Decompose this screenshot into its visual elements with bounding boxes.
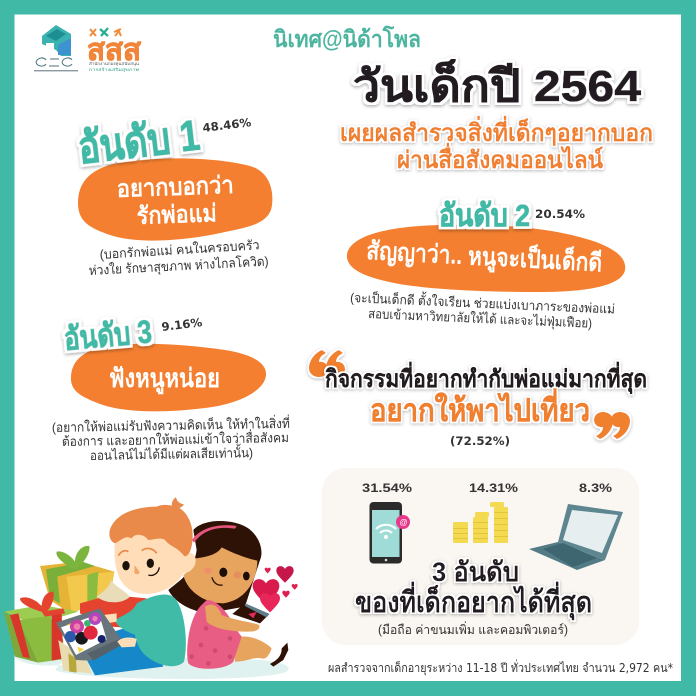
blob 3 text: ฟังหนูหน่อย [109,363,220,395]
boy face [115,520,190,594]
logo: GSCM [34,25,78,71]
rank 3 description: ออนไลน์ไม่ได้มีแต่ผลเสียเท่านั้น) [90,443,253,463]
panel heading: 3 อันดับ [432,557,519,587]
rank 1 description: ห่วงใย รักษาสุขภาพ ห่างไกลโควิด) [88,254,269,279]
rank 3 label: อันดับ 3 [62,313,153,357]
gift: yellow box [40,546,114,613]
rank 1 percent: 48.46% [202,115,252,135]
rank 2 description: สอบเข้ามหาวิทยาลัยให้ได้ และจะไม่ฟุ่มเฟือย) [368,306,592,332]
blob 2 [347,225,625,292]
girl hair back [168,521,261,613]
boy eyes [122,561,130,570]
girl dress [187,600,242,669]
header: poll name: นิเทศ@นิด้าโพล [273,25,421,52]
gift: cream box [58,640,92,673]
girl arm [205,605,259,632]
icon: smartphone: @ [400,518,408,527]
boy torso [115,594,186,666]
blob 2 text: สัญญาว่า.. หนูจะเป็นเด็กดี [366,235,603,279]
icon: close quote [594,412,630,439]
girl shoe [270,643,288,667]
girl face [183,547,257,603]
logo: ThaiHealth: สำนักงานกองทุนสนับสนุน [89,61,139,67]
rank 2 percent: 20.54% [535,207,585,221]
subtitle [340,115,653,174]
logo: ThaiHealth: การสร้างเสริมสุขภาพ [89,67,139,73]
rank 2 label: อันดับ 2 [439,198,530,233]
boy hand [103,613,117,623]
quote block [309,350,647,448]
logos [34,25,142,73]
panel heading [355,557,592,620]
subtitle: เผยผลสำรวจสิ่งที่เด็กๆอยากบอก [340,115,653,147]
boy legs [85,628,163,675]
rank 2 description [350,288,615,332]
girl legs [233,637,272,662]
panel heading: ของที่เด็กอยากได้ที่สุด [355,581,592,620]
boy hair [109,505,193,556]
blob 1 text: อยากบอกว่า [116,172,234,203]
girl [168,521,298,669]
rank 3 description [52,414,290,463]
icon: open quote [309,350,345,377]
rank 1 description: (บอกรักพ่อแม่ คนในครอบครัว [99,237,260,262]
blob 1 text [116,172,234,230]
blob 1 [78,158,272,241]
gift: green box [4,592,78,663]
boy [85,497,196,675]
rank 1 panel [76,111,272,279]
panel note: (มือถือ ค่าขนมเพิ่ม และคอมพิวเตอร์) [378,621,568,637]
rank 3 panel [52,313,290,463]
rank 2 description: (จะเป็นเด็กดี ตั้งใจเรียน ช่วยแบ่งเบาภาระของพ่อแม่ [350,288,615,317]
percent labels: 14.31% [469,483,518,495]
rank 3 description: (อยากให้พ่อแม่รับฟังความคิดเห็น ให้ทำในสิ่งที่ [52,414,290,435]
girl phone [232,603,269,623]
subtitle: ผ่านสื่อสังคมออนไลน์ [397,142,604,174]
laptop with social icons [56,608,137,661]
girl head band [192,525,237,543]
percent labels: 31.54% [362,483,412,495]
panel background [322,468,639,645]
rank 3 description: ต้องการ และอยากให้พ่อแม่เข้าใจว่าสื่อสังคม [62,429,289,449]
title: วันเด็กปี 2564 [353,59,642,111]
rank 1 description [88,237,269,279]
hearts [253,566,298,612]
blob 1 text: รักพ่อแม่ [136,200,217,230]
rank 1 label: อันดับ 1 [76,111,202,173]
panel: top 3 wanted things [322,468,639,645]
quote heading: กิจกรรมที่อยากทำกับพ่อแม่มากที่สุด [325,361,647,395]
blob 3 [71,344,266,411]
percent labels [362,483,612,495]
icon: smartphone [370,502,410,564]
percent labels: 8.3% [579,483,612,495]
illustration: children with gifts [4,497,298,679]
ground shadow [15,654,289,679]
rank 2 panel [347,198,625,332]
icon: laptop [529,504,623,570]
logo: ThaiHealth: สสส [87,34,142,67]
rank 3 percent: 9.16% [161,315,204,334]
gift: red box behind [80,595,147,628]
quote highlight: อยากให้พาไปเที่ยว [370,388,590,428]
icon: coins [453,502,508,543]
boy ear [180,553,196,573]
quote percent: (72.52%) [450,434,510,448]
